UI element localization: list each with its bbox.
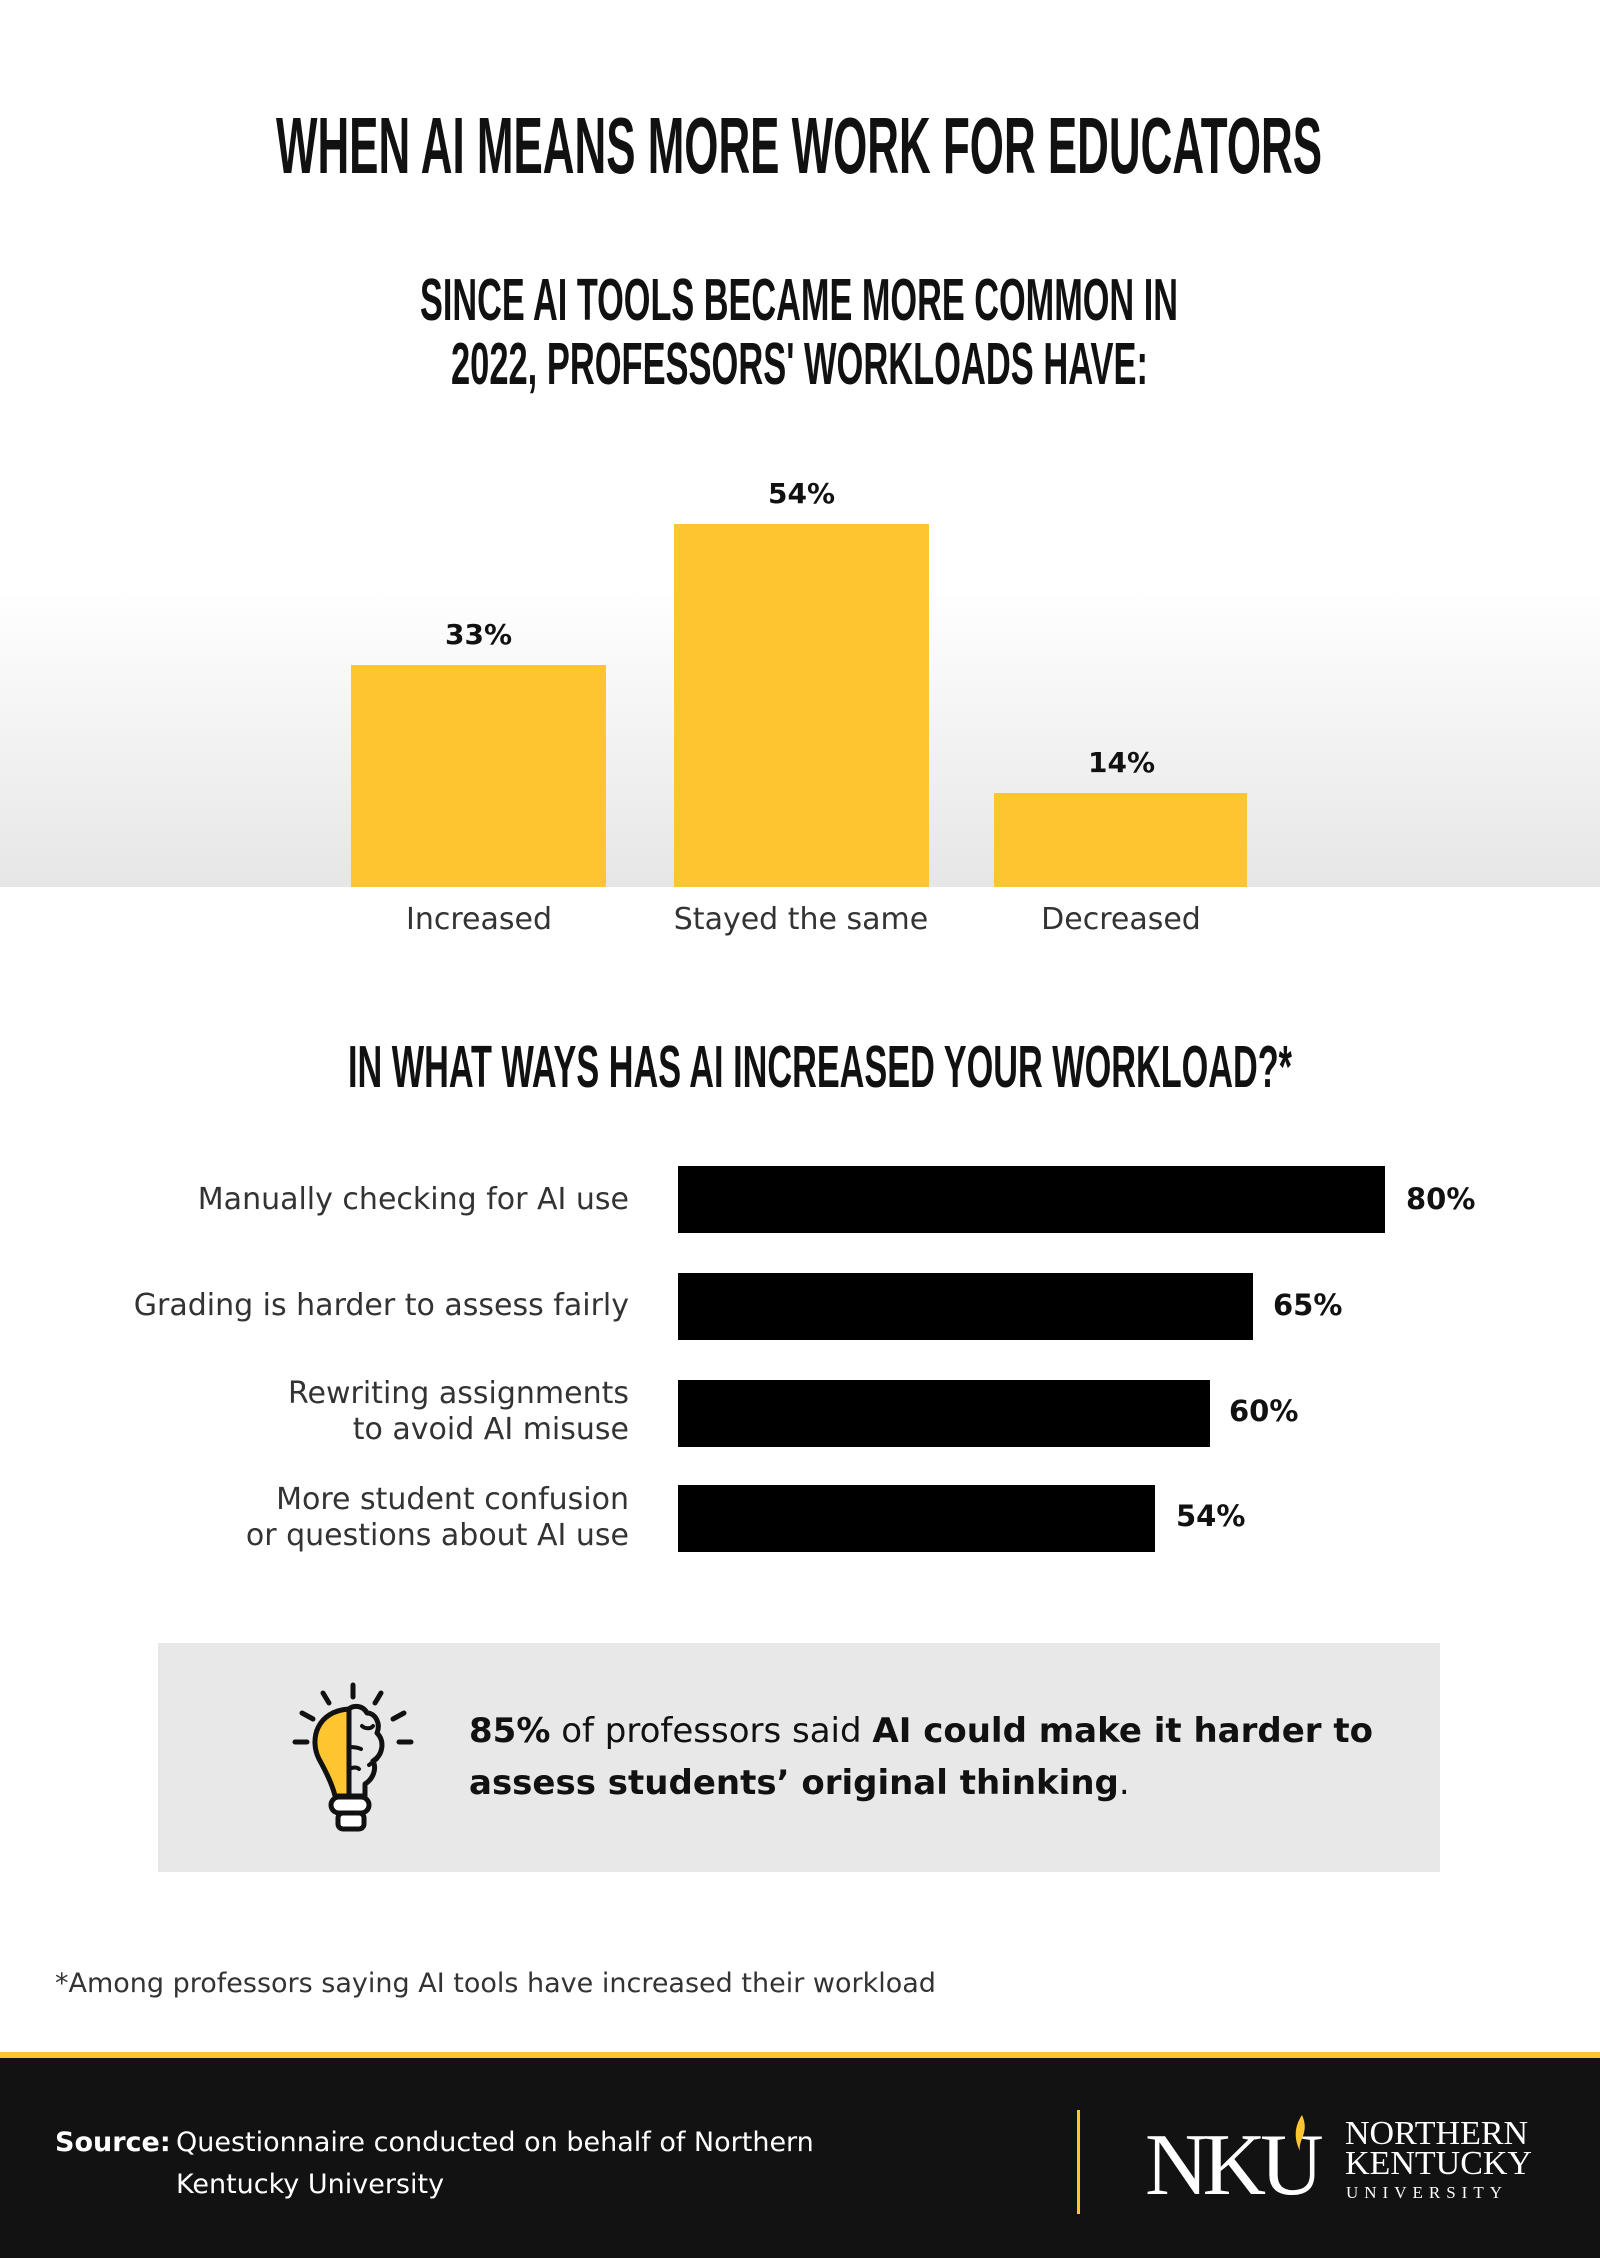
horizontal bar chart: 80% — [1406, 1182, 1475, 1216]
logo: NKU: NORTHERN — [1345, 2115, 1528, 2152]
bar chart: workloads — [351, 477, 1247, 937]
horizontal bar chart: More student confusion — [276, 1482, 629, 1517]
bar: increased — [351, 665, 606, 887]
bar chart: workloads: Decreased — [1041, 902, 1201, 937]
bar chart: workloads: 14% — [1088, 746, 1155, 779]
bar chart: workloads: Stayed the same — [674, 902, 928, 937]
source text: Kentucky University — [176, 2169, 444, 2200]
footer — [0, 2052, 1600, 2258]
source text: Questionnaire conducted on behalf of Northern — [176, 2127, 814, 2158]
bar: decreased — [994, 793, 1247, 887]
logo: NKU: UNIVERSITY — [1346, 2183, 1508, 2202]
bar chart: workloads: 54% — [768, 477, 835, 510]
logo: NKU: KENTUCKY — [1345, 2145, 1532, 2182]
gradient band — [0, 590, 1600, 887]
value labels: 33% — [445, 618, 512, 651]
category labels: Increased — [406, 902, 552, 937]
horizontal bar chart: Rewriting assignments — [288, 1376, 629, 1411]
horizontal bar chart: Manually checking for AI use — [198, 1182, 629, 1217]
source text: Source: — [55, 2127, 171, 2158]
logo: NKU: NKU — [1145, 2117, 1318, 2214]
title — [276, 101, 1322, 397]
divider — [1077, 2110, 1080, 2214]
bar: stayed the same — [674, 524, 929, 887]
horizontal bar chart: 54% — [1176, 1499, 1245, 1533]
callout text: 85% of professors said AI could make it harder to assess students’ original thinking. — [469, 1711, 1373, 1803]
horizontal bar chart: 65% — [1273, 1288, 1342, 1322]
footnote: *Among professors saying AI tools have increased their workload — [55, 1968, 936, 1999]
source text — [55, 2127, 814, 2200]
horizontal bar chart: or questions about AI use — [246, 1518, 629, 1553]
icon: lightbulb brain — [292, 1682, 414, 1832]
logo: NKU — [1145, 2115, 1532, 2214]
horizontal bar chart: 60% — [1229, 1394, 1298, 1428]
horizontal bar chart: Grading is harder to assess fairly — [134, 1288, 629, 1323]
horizontal bar chart: to avoid AI misuse — [353, 1412, 629, 1447]
horizontal bar chart — [134, 1166, 1475, 1553]
callout — [158, 1643, 1440, 1872]
